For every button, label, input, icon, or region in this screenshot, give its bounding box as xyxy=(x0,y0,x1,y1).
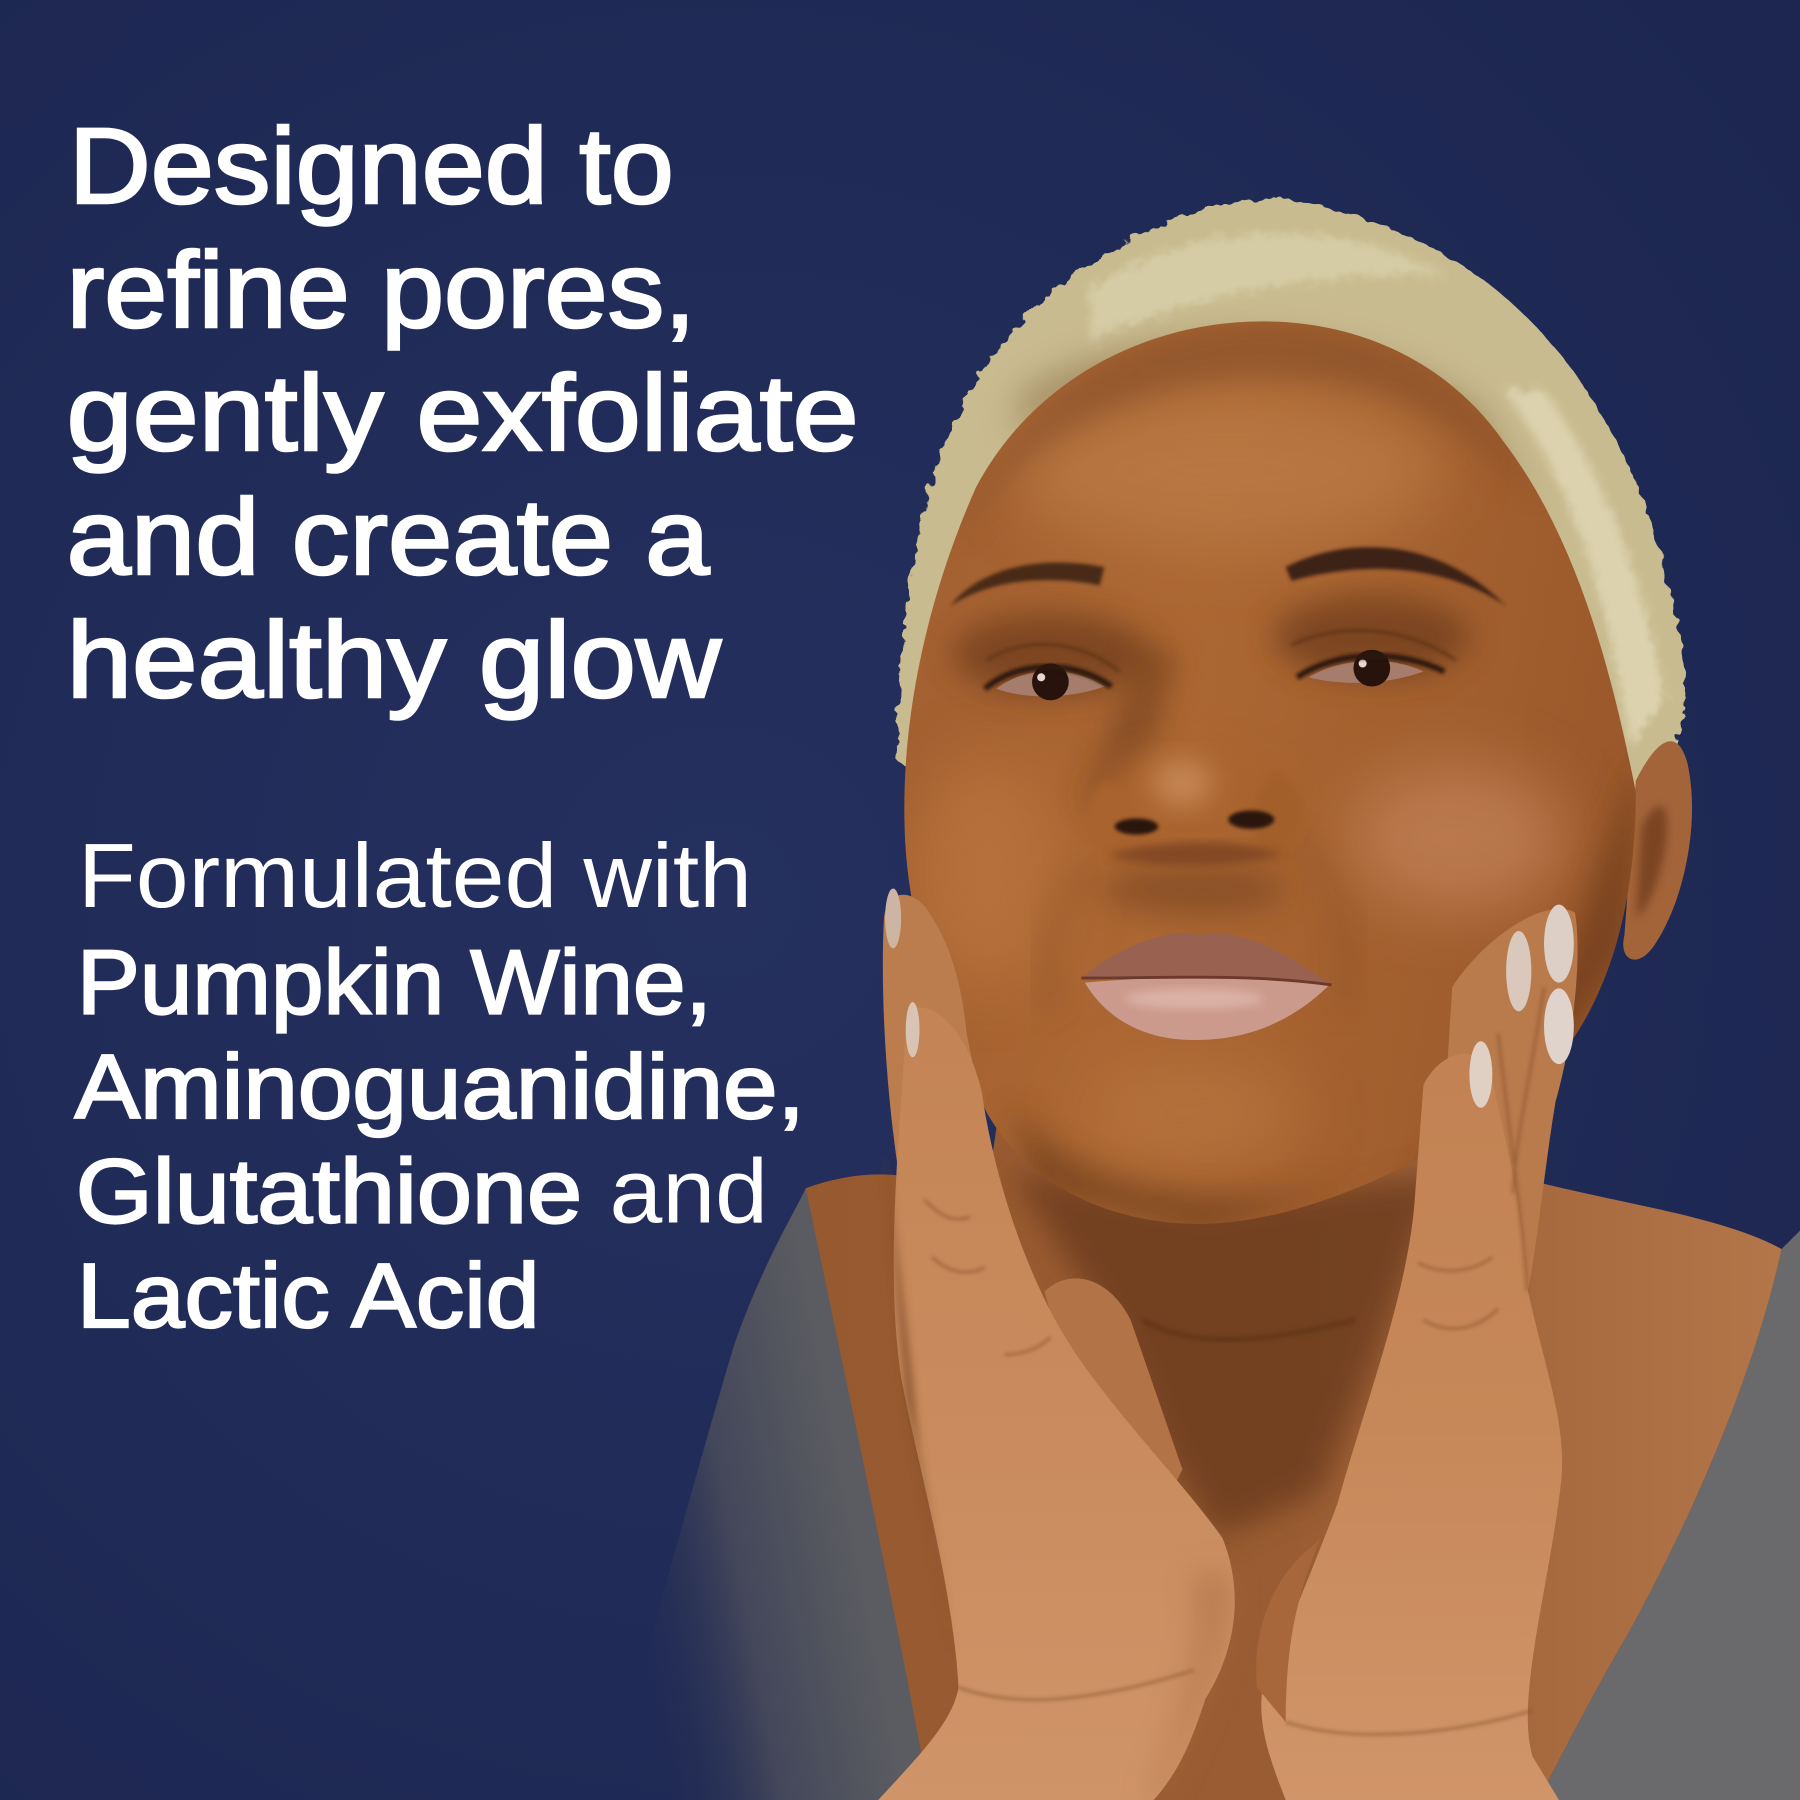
ingredients text xyxy=(75,826,805,1347)
left eye xyxy=(985,644,1119,700)
right iris xyxy=(1353,650,1390,686)
eye socket shade left xyxy=(953,613,1148,696)
right nail side xyxy=(1544,988,1574,1064)
face xyxy=(904,321,1636,1224)
right nostril xyxy=(1228,810,1274,829)
under nose shade xyxy=(1102,864,1286,915)
right eye xyxy=(1291,631,1456,686)
neck crease xyxy=(1142,1320,1355,1340)
hair right highlight xyxy=(1504,390,1665,746)
heading line 3: gently exfoliate xyxy=(67,352,859,473)
right eye white xyxy=(1309,661,1423,683)
left finger creases xyxy=(924,1200,1194,1700)
forehead top shadow xyxy=(982,322,1508,496)
chin light xyxy=(1134,1077,1274,1150)
hair top highlight xyxy=(1091,234,1446,344)
left eye glint xyxy=(1037,673,1045,681)
left eyebrow xyxy=(951,562,1104,606)
left hand palm xyxy=(878,1007,1235,1800)
heading xyxy=(67,105,859,720)
right hand palm xyxy=(1261,1054,1562,1800)
left lid fold xyxy=(987,644,1119,672)
nose left wing xyxy=(1085,781,1140,856)
right cheek light xyxy=(1349,763,1567,913)
heading line 2: refine pores, xyxy=(67,229,696,350)
right ear xyxy=(1623,741,1692,960)
left hand outer shading xyxy=(884,1148,953,1653)
glutathione line: Glutathione xyxy=(76,1142,582,1243)
left lid line xyxy=(985,667,1111,689)
eye socket shade right xyxy=(1274,596,1469,678)
photo: woman touching her face xyxy=(608,197,1800,1800)
nose highlight xyxy=(1153,760,1212,806)
left top nail xyxy=(885,889,901,948)
upper lip xyxy=(1081,933,1332,985)
nose right wing xyxy=(1255,769,1303,855)
lip line xyxy=(1081,977,1332,985)
left nostril xyxy=(1115,818,1158,835)
left cheek xyxy=(904,769,1052,974)
lower lip shine xyxy=(1125,988,1263,1009)
left hand xyxy=(878,889,1235,1800)
right lid line xyxy=(1297,656,1444,677)
left eye white xyxy=(996,671,1104,696)
smile line left xyxy=(1046,867,1085,1010)
heading line 5: healthy glow xyxy=(67,599,722,720)
smile line right xyxy=(1297,838,1347,1010)
hair mass xyxy=(898,197,1685,792)
right face edge shadow xyxy=(1571,776,1636,1038)
left hand back fingers xyxy=(883,895,1010,1263)
nose underside xyxy=(1108,842,1283,865)
right lid fold xyxy=(1291,631,1456,660)
shirt left shoulder xyxy=(608,1188,936,1800)
aminoguanidine line: Aminoguanidine, xyxy=(75,1037,805,1138)
left palm lower shade xyxy=(1148,1573,1229,1800)
and word: and xyxy=(610,1142,768,1243)
heading line 1: Designed to xyxy=(69,105,674,226)
right inner palm shadow xyxy=(1256,1538,1320,1722)
hair xyxy=(898,197,1685,792)
right hand upper fingers xyxy=(1435,909,1578,1297)
nose side shade xyxy=(1085,643,1177,827)
right nail middle xyxy=(1506,931,1531,1011)
lips xyxy=(1081,933,1332,1040)
formulated with line: Formulated with xyxy=(78,826,752,927)
heading line 4: and create a xyxy=(67,476,709,597)
neck shadow xyxy=(1010,1171,1446,1538)
right eye glint xyxy=(1359,660,1367,668)
ear inner shade xyxy=(1636,806,1667,918)
forehead glow xyxy=(1010,390,1446,551)
left nail xyxy=(906,1002,920,1057)
right eyebrow xyxy=(1286,547,1506,606)
hairline shadow xyxy=(1010,336,1550,528)
right nail top xyxy=(1544,905,1574,983)
right hand xyxy=(1256,905,1578,1800)
face shading xyxy=(913,321,1642,1234)
left iris xyxy=(1032,664,1069,700)
shirt right shoulder xyxy=(1538,1231,1800,1800)
lactic acid line: Lactic Acid xyxy=(77,1246,540,1347)
left thumb xyxy=(1045,1278,1182,1538)
nose tip xyxy=(1096,746,1291,849)
jaw shadow xyxy=(1006,1114,1308,1224)
pumpkin wine line: Pumpkin Wine, xyxy=(77,933,712,1034)
chest and neck skin xyxy=(806,1033,1782,1800)
right nail lower xyxy=(1469,1041,1492,1108)
right finger divisions xyxy=(1286,987,1544,1734)
lower lip xyxy=(1085,978,1329,1040)
nose xyxy=(1085,746,1303,865)
